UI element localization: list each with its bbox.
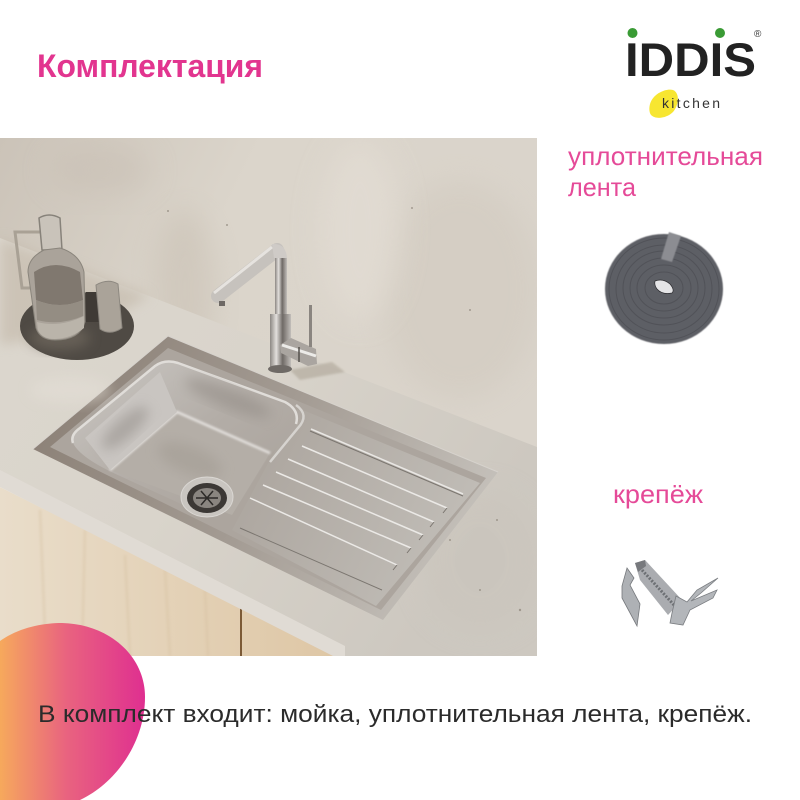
tape centre hole bbox=[655, 280, 673, 294]
carafe neck bbox=[39, 215, 62, 250]
logo registered mark: ® bbox=[754, 29, 762, 40]
carafe and tray bbox=[15, 215, 134, 360]
label: sealing tape: лента bbox=[568, 172, 637, 202]
tape roll bbox=[605, 234, 723, 344]
sink bowl bbox=[73, 362, 262, 484]
countertop foreground light bbox=[83, 384, 113, 408]
tray bbox=[20, 292, 134, 360]
clip spring arm bbox=[635, 560, 682, 615]
label: fastener: крепёж bbox=[613, 479, 704, 509]
sink bbox=[33, 336, 498, 620]
logo yellow spot bbox=[649, 90, 678, 118]
label: sealing tape: уплотнительная bbox=[568, 141, 763, 171]
kitchen sink photo bbox=[0, 138, 540, 660]
carafe handle bbox=[15, 232, 40, 288]
photo speckle bbox=[167, 207, 521, 611]
faucet body bbox=[270, 314, 291, 368]
icon: fastener clip bbox=[622, 560, 718, 626]
drain strainer bbox=[181, 477, 233, 517]
faucet spout bbox=[218, 250, 277, 296]
bottom description: В комплект входит: мойка, уплотнительная лента, крепёж. bbox=[38, 701, 752, 728]
clip left bracket bbox=[622, 568, 640, 626]
countertop bbox=[0, 238, 537, 656]
bowl inner walls bbox=[225, 489, 248, 514]
countertop front edge bbox=[0, 470, 345, 658]
faucet bbox=[214, 244, 345, 380]
faucet neck bbox=[275, 258, 287, 318]
gradient blob bbox=[0, 623, 145, 800]
carafe body bbox=[28, 248, 85, 340]
logo kitchen text: kitchen bbox=[662, 95, 720, 111]
logo wordmark: IDDIS bbox=[625, 33, 756, 86]
faucet handle bbox=[280, 338, 317, 366]
cabinet fronts bbox=[0, 487, 345, 660]
faucet shadow bbox=[290, 362, 345, 380]
drainboard grooves bbox=[250, 446, 447, 565]
logo dots bbox=[628, 28, 725, 38]
title: Комплектация bbox=[37, 48, 263, 84]
tape tail bbox=[661, 232, 681, 262]
clip right bracket bbox=[670, 578, 718, 625]
wall bbox=[0, 138, 537, 468]
sink rim bbox=[33, 336, 498, 620]
faucet lever bbox=[309, 305, 312, 347]
drinking glass bbox=[96, 281, 122, 332]
logo: IDDIS kitchen bbox=[625, 28, 762, 118]
icon: sealing tape roll bbox=[605, 232, 723, 344]
sink drainboard bbox=[278, 427, 480, 606]
